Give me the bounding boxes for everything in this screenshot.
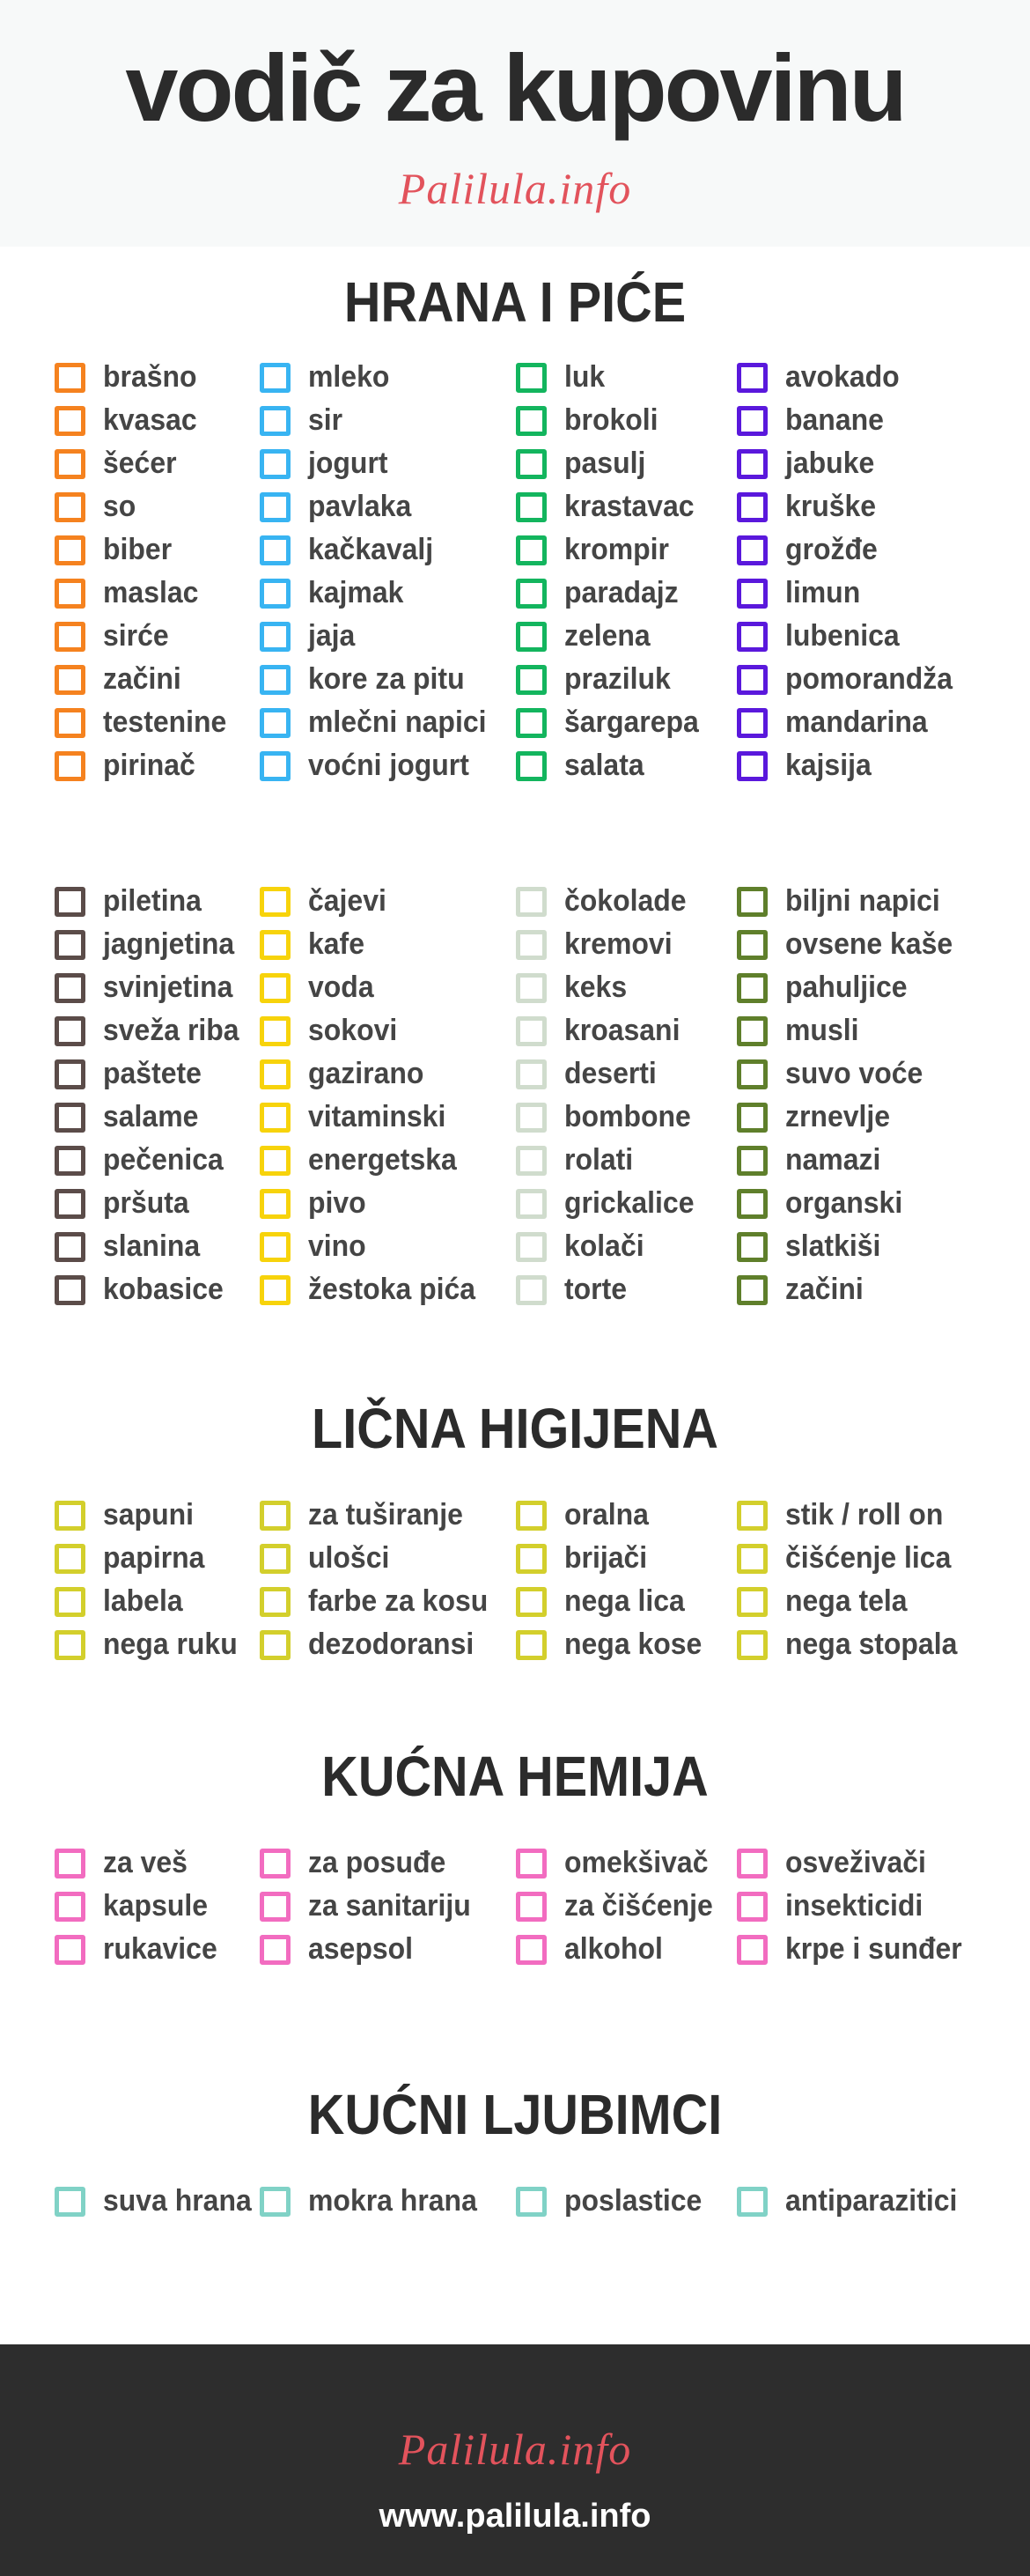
panel: food list block 2: organski bbox=[785, 1186, 902, 1220]
heading: hrana i piće: HRANA I PIĆE bbox=[344, 270, 686, 334]
panel: hygiene list: nega stopala bbox=[785, 1628, 957, 1661]
panel: hygiene list: labela bbox=[103, 1584, 183, 1618]
panel: food list block 1: pavlaka bbox=[308, 490, 411, 523]
panel: food list block 2: rolati bbox=[564, 1143, 633, 1177]
panel: food list block 1: jaja bbox=[308, 619, 355, 653]
panel: food list block 1: šargarepa bbox=[564, 705, 699, 739]
panel: food list block 2: torte bbox=[564, 1273, 627, 1306]
panel: hygiene list bbox=[55, 1498, 958, 1661]
panel: food list block 2: kafe bbox=[308, 927, 364, 961]
panel: food list block 2: kolači bbox=[564, 1229, 644, 1263]
panel: food list block 1: začini bbox=[103, 662, 181, 696]
panel: food list block 2: jagnjetina bbox=[103, 927, 234, 961]
panel: food list block 2: pršuta bbox=[103, 1186, 189, 1220]
panel: hygiene list: sapuni bbox=[103, 1498, 194, 1532]
panel: food list block 2: vitaminski bbox=[308, 1100, 445, 1133]
panel: food list block 2: svinjetina bbox=[103, 971, 232, 1004]
panel: food list block 2: zrnevlje bbox=[785, 1100, 890, 1133]
panel: food list block 2: kroasani bbox=[564, 1014, 680, 1047]
panel: food list block 2: voda bbox=[308, 971, 374, 1004]
panel: hygiene list: nega kose bbox=[564, 1628, 702, 1661]
panel: household chemicals list: osveživači bbox=[785, 1846, 926, 1879]
panel: food list block 2 bbox=[55, 884, 953, 1306]
panel: household chemicals list: omekšivač bbox=[564, 1846, 708, 1879]
panel: household chemicals list bbox=[55, 1846, 962, 1966]
panel: food list block 1: grožđe bbox=[785, 533, 878, 566]
panel: food list block 2: namazi bbox=[785, 1143, 880, 1177]
panel: food list block 1: lubenica bbox=[785, 619, 900, 653]
panel: food list block 2: salame bbox=[103, 1100, 198, 1133]
panel: food list block 2: sokovi bbox=[308, 1014, 397, 1047]
panel: food list block 2: čokolade bbox=[564, 884, 687, 918]
panel: food list block 1: paradajz bbox=[564, 576, 679, 609]
panel: food list block 1: salata bbox=[564, 749, 644, 782]
header background bbox=[0, 0, 1030, 247]
panel: hygiene list: nega tela bbox=[785, 1584, 908, 1618]
panel: food list block 2: kremovi bbox=[564, 927, 673, 961]
footer signature logo: Palilula.info bbox=[399, 2425, 631, 2474]
panel: food list block 1: so bbox=[103, 490, 136, 523]
panel: pets list: suva hrana bbox=[103, 2184, 252, 2218]
panel: food list block 2: bombone bbox=[564, 1100, 691, 1133]
panel: food list block 1: jogurt bbox=[308, 447, 388, 480]
panel: food list block 1: pirinač bbox=[103, 749, 195, 782]
panel: food list block 1: brašno bbox=[103, 360, 197, 394]
heading: lična higijena: LIČNA HIGIJENA bbox=[312, 1397, 718, 1460]
panel: food list block 1: pomorandža bbox=[785, 662, 953, 696]
heading: kućni ljubimci: KUĆNI LJUBIMCI bbox=[308, 2083, 722, 2146]
panel: pets list: mokra hrana bbox=[308, 2184, 477, 2218]
signature logo: Palilula.info bbox=[399, 164, 631, 213]
panel: hygiene list: dezodoransi bbox=[308, 1628, 474, 1661]
panel: food list block 2: musli bbox=[785, 1014, 858, 1047]
panel: food list block 1: kvasac bbox=[103, 403, 197, 437]
panel: hygiene list: stik / roll on bbox=[785, 1498, 943, 1532]
panel: hygiene list: papirna bbox=[103, 1541, 204, 1575]
panel: food list block 1: krastavac bbox=[564, 490, 695, 523]
panel: food list block 1: testenine bbox=[103, 705, 226, 739]
panel: food list block 1: sir bbox=[308, 403, 342, 437]
panel: food list block 1: kačkavalj bbox=[308, 533, 433, 566]
panel: hygiene list: nega lica bbox=[564, 1584, 685, 1618]
panel: food list block 1: praziluk bbox=[564, 662, 671, 696]
panel: pets list: antiparazitici bbox=[785, 2184, 957, 2218]
panel: food list block 1: mlečni napici bbox=[308, 705, 486, 739]
panel: household chemicals list: za sanitariju bbox=[308, 1889, 471, 1923]
panel: food list block 2: biljni napici bbox=[785, 884, 940, 918]
panel: food list block 1: mleko bbox=[308, 360, 389, 394]
heading: kućna hemija: KUĆNA HEMIJA bbox=[321, 1745, 709, 1808]
panel: hygiene list: za tuširanje bbox=[308, 1498, 463, 1532]
panel: food list block 1: limun bbox=[785, 576, 860, 609]
panel: pets list bbox=[55, 2184, 957, 2218]
panel: food list block 1: kruške bbox=[785, 490, 876, 523]
panel: food list block 2: začini bbox=[785, 1273, 864, 1306]
panel: household chemicals list: kapsule bbox=[103, 1889, 208, 1923]
panel: food list block 2: grickalice bbox=[564, 1186, 694, 1220]
panel: food list block 1: šećer bbox=[103, 447, 177, 480]
panel: food list block 2: piletina bbox=[103, 884, 202, 918]
footer bbox=[0, 2344, 1030, 2576]
panel: household chemicals list: za čišćenje bbox=[564, 1889, 713, 1923]
panel: household chemicals list: alkohol bbox=[564, 1932, 663, 1966]
panel: food list block 2: žestoka pića bbox=[308, 1273, 475, 1306]
panel: food list block 2: kobasice bbox=[103, 1273, 224, 1306]
panel: food list block 2: deserti bbox=[564, 1057, 657, 1090]
panel: food list block 2: čajevi bbox=[308, 884, 386, 918]
panel: food list block 1: zelena bbox=[564, 619, 651, 653]
panel: hygiene list: oralna bbox=[564, 1498, 649, 1532]
panel: food list block 1: maslac bbox=[103, 576, 198, 609]
panel: pets list: poslastice bbox=[564, 2184, 702, 2218]
panel: food list block 1: banane bbox=[785, 403, 884, 437]
panel: food list block 2: pivo bbox=[308, 1186, 366, 1220]
footer url: www.palilula.info bbox=[379, 2498, 651, 2535]
panel: food list block 1: brokoli bbox=[564, 403, 658, 437]
panel: food list block 2: energetska bbox=[308, 1143, 457, 1177]
panel: household chemicals list: insekticidi bbox=[785, 1889, 923, 1923]
panel: food list block 1: biber bbox=[103, 533, 172, 566]
panel: food list block 2: gazirano bbox=[308, 1057, 423, 1090]
panel: food list block 2: slatkiši bbox=[785, 1229, 880, 1263]
panel: hygiene list: nega ruku bbox=[103, 1628, 238, 1661]
panel: food list block 1 bbox=[55, 360, 953, 782]
panel: hygiene list: ulošci bbox=[308, 1541, 389, 1575]
panel: food list block 2: pečenica bbox=[103, 1143, 224, 1177]
panel: food list block 1: pasulj bbox=[564, 447, 645, 480]
panel: food list block 1: kajsija bbox=[785, 749, 872, 782]
panel: household chemicals list: asepsol bbox=[308, 1932, 413, 1966]
panel: food list block 1: kajmak bbox=[308, 576, 403, 609]
panel: hygiene list: brijači bbox=[564, 1541, 647, 1575]
panel: food list block 2: sveža riba bbox=[103, 1014, 239, 1047]
panel: food list block 1: sirće bbox=[103, 619, 169, 653]
panel: food list block 2: suvo voće bbox=[785, 1057, 923, 1090]
panel: household chemicals list: rukavice bbox=[103, 1932, 217, 1966]
panel: food list block 1: kore za pitu bbox=[308, 662, 465, 696]
panel: household chemicals list: krpe i sunđer bbox=[785, 1932, 962, 1966]
panel: household chemicals list: za posuđe bbox=[308, 1846, 445, 1879]
panel: food list block 1: krompir bbox=[564, 533, 669, 566]
panel: hygiene list: farbe za kosu bbox=[308, 1584, 488, 1618]
panel: food list block 2: paštete bbox=[103, 1057, 202, 1090]
panel: food list block 2: pahuljice bbox=[785, 971, 908, 1004]
panel: food list block 1: mandarina bbox=[785, 705, 928, 739]
panel: food list block 1: luk bbox=[564, 360, 605, 394]
panel: food list block 2: slanina bbox=[103, 1229, 200, 1263]
panel: food list block 2: ovsene kaše bbox=[785, 927, 953, 961]
panel: hygiene list: čišćenje lica bbox=[785, 1541, 951, 1575]
panel: food list block 1: voćni jogurt bbox=[308, 749, 469, 782]
panel: food list block 1: jabuke bbox=[785, 447, 874, 480]
panel: household chemicals list: za veš bbox=[103, 1846, 188, 1879]
panel: food list block 1: avokado bbox=[785, 360, 900, 394]
title: vodič za kupovinu bbox=[125, 34, 905, 141]
panel: food list block 2: vino bbox=[308, 1229, 366, 1263]
panel: food list block 2: keks bbox=[564, 971, 627, 1004]
